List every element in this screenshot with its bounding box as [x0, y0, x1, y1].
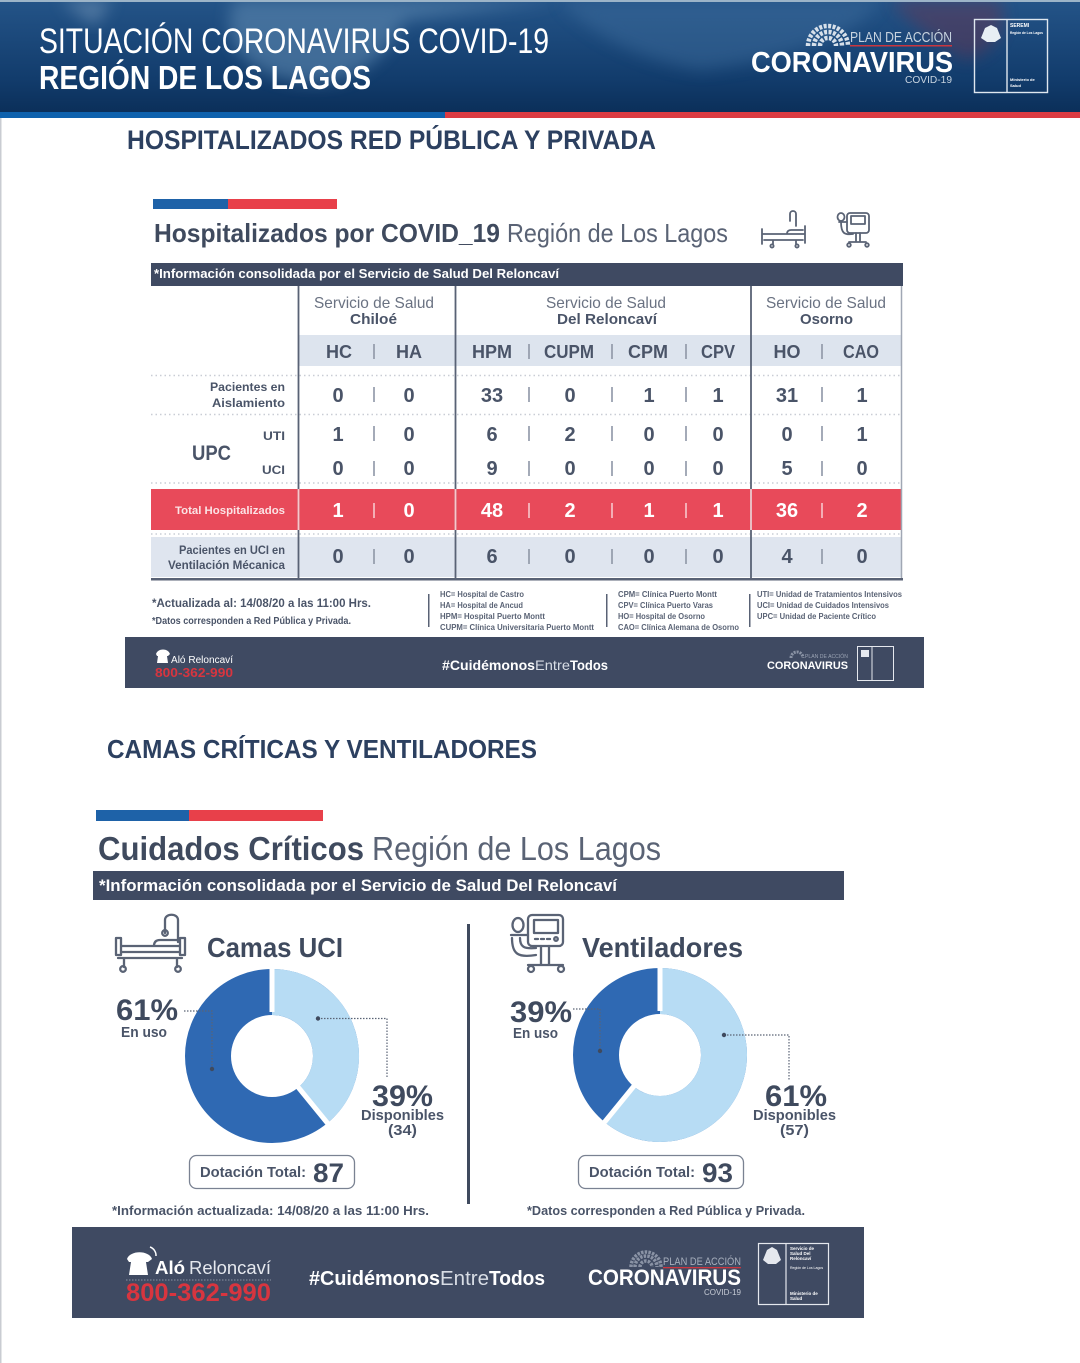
row: UCI: 5 — [781, 458, 793, 480]
row: UTI: 0 — [712, 424, 724, 446]
row labels: Total Hospitalizados — [175, 505, 285, 517]
panel: cuidados críticos — [72, 810, 864, 1318]
heading: camas críticas y ventiladores: CAMAS CRÍTICAS Y VENTILADORES — [107, 734, 537, 764]
header stripe — [0, 112, 1080, 118]
column headers: HA — [396, 342, 422, 362]
helpline: Aló — [155, 1258, 185, 1278]
chart: camas uci donut — [116, 966, 444, 1139]
update note — [152, 596, 371, 627]
callout: en uso: 39% — [510, 996, 572, 1029]
row labels: Pacientes en UCI en — [179, 543, 285, 557]
table banner: *Información consolidada por el Servicio de Salud Del Reloncaví — [154, 266, 559, 281]
hashtag: Todos — [570, 657, 608, 673]
row: total hospitalizados: 48 — [481, 500, 503, 522]
header banner — [0, 0, 1080, 118]
logo: coronavirus: CORONAVIRUS — [767, 660, 848, 672]
glossary: UTI= Unidad de Tratamientos Intensivos — [757, 590, 903, 599]
header title — [39, 22, 549, 96]
header logo: plan de acción coronavirus: CORONAVIRUS — [751, 47, 953, 79]
row: UTI: 1 — [332, 424, 344, 446]
glossary: CPV= Clínica Puerto Varas — [618, 601, 714, 610]
callout: disponibles: Disponibles — [753, 1107, 836, 1124]
row: UTI: 0 — [643, 424, 655, 446]
heading: camas uci: Camas UCI — [207, 932, 343, 963]
row: total hospitalizados: 2 — [564, 500, 576, 522]
table: hospitalizados — [151, 286, 903, 580]
info banner — [93, 871, 844, 900]
row: UTI: 0 — [403, 424, 415, 446]
total: camas uci: Dotación Total: — [200, 1165, 306, 1181]
header logo: plan de acción coronavirus: COVID-19 — [905, 74, 952, 86]
callout: en uso: En uso — [513, 1025, 558, 1042]
row labels: Ventilación Mécanica — [168, 558, 285, 572]
icon: icu bed — [116, 915, 185, 972]
row: total hospitalizados — [332, 500, 868, 522]
row labels: UTI — [263, 429, 285, 443]
callout: disponibles: 61% — [765, 1080, 827, 1113]
column headers: CUPM — [544, 342, 594, 362]
row: UCI: 0 — [403, 458, 415, 480]
row: pacientes en aislamiento: 0 — [403, 385, 415, 407]
row: pacientes en aislamiento: 0 — [564, 385, 576, 407]
header logo: plan de acción coronavirus — [751, 26, 953, 86]
panel title: Cuidados Críticos — [98, 830, 364, 867]
row: pacientes en aislamiento: 1 — [712, 385, 724, 407]
icon: telephone — [156, 650, 170, 663]
update note: *Datos corresponden a Red Pública y Privada. — [152, 615, 351, 627]
callout: disponibles: 39% — [372, 1080, 433, 1113]
glossary: CUPM= Clínica Universitaria Puerto Montt — [440, 623, 594, 632]
glossary: HA= Hospital de Ancud — [440, 601, 523, 610]
panel title: Hospitalizados por COVID_19 — [154, 218, 500, 248]
row: ventilación mecánica: 0 — [564, 546, 576, 568]
panel title — [154, 218, 728, 248]
column headers: HC — [326, 342, 352, 362]
icon: ventilator large — [511, 915, 564, 972]
header logo: seremi: Salud — [1010, 83, 1021, 88]
row: pacientes en aislamiento: 1 — [643, 385, 655, 407]
row: pacientes en aislamiento — [332, 385, 868, 407]
row: ventilación mecánica: 0 — [403, 546, 415, 568]
hashtag — [442, 657, 608, 673]
column headers: HO — [774, 342, 800, 362]
footer band: hospitalizados — [125, 637, 924, 688]
logo: coronavirus: PLAN DE ACCIÓN — [805, 653, 848, 660]
hashtag: #Cuidémonos — [442, 657, 535, 673]
chart: ventiladores donut — [510, 965, 836, 1139]
column headers: CAO — [843, 342, 879, 362]
callout: disponibles: (57) — [780, 1122, 809, 1139]
service names: Servicio de Salud — [314, 295, 434, 312]
header title: SITUACIÓN CORONAVIRUS COVID-19 — [39, 22, 549, 61]
callout: en uso — [116, 994, 214, 1071]
row: ventilación mecánica: 0 — [643, 546, 655, 568]
update note: *Información actualizada: 14/08/20 a las 11:00 Hrs. — [112, 1203, 429, 1218]
logo: coronavirus: CORONAVIRUS — [588, 1265, 741, 1290]
row: pacientes en aislamiento: 0 — [332, 385, 344, 407]
row: UCI: 0 — [332, 458, 344, 480]
column separators — [374, 344, 822, 564]
row: UTI: 0 — [781, 424, 793, 446]
service names: Servicio de Salud — [766, 295, 886, 312]
logo: coronavirus: PLAN DE ACCIÓN — [663, 1255, 741, 1268]
service names — [314, 295, 886, 328]
hashtag: Entre — [440, 1268, 489, 1290]
glossary: HPM= Hospital Puerto Montt — [440, 612, 545, 621]
update note: *Actualizada al: 14/08/20 a las 11:00 Hrs. — [152, 596, 371, 610]
callout: disponibles: (34) — [388, 1122, 417, 1139]
header logo: seremi: SEREMI — [1010, 23, 1030, 29]
row: pacientes en aislamiento: 31 — [776, 385, 798, 407]
total: camas uci — [190, 1156, 354, 1188]
total: ventiladores: 93 — [702, 1158, 733, 1188]
logo: servicio de salud: Servicio de — [790, 1246, 815, 1251]
glossary: HO= Hospital de Osorno — [618, 612, 705, 621]
total: ventiladores: Dotación Total: — [589, 1165, 695, 1181]
table banner — [151, 263, 903, 286]
glossary: HC= Hospital de Castro — [440, 590, 524, 599]
row: total hospitalizados: 1 — [712, 500, 724, 522]
callout: disponibles — [722, 1033, 836, 1139]
glossary: UCI= Unidad de Cuidados Intensivos — [757, 601, 890, 610]
row: total hospitalizados: 0 — [403, 500, 415, 522]
header logo: seremi — [974, 19, 1048, 92]
logo: servicio de salud: Salud Del — [790, 1251, 811, 1256]
row: UCI: 0 — [564, 458, 576, 480]
logo: servicio de salud: Región de Los Lagos — [790, 1266, 823, 1270]
glossary: CPM= Clínica Puerto Montt — [618, 590, 717, 599]
logo: coronavirus: COVID-19 — [704, 1288, 742, 1297]
row: ventilación mecánica — [332, 546, 868, 568]
panel title: Región de Los Lagos — [507, 218, 728, 248]
accent stripe — [96, 810, 323, 821]
heading: ventiladores: Ventiladores — [582, 932, 743, 963]
row: UCI: 0 — [712, 458, 724, 480]
divider — [467, 924, 470, 1204]
row: UCI — [332, 458, 868, 480]
callout: disponibles: Disponibles — [361, 1107, 444, 1124]
service names: Servicio de Salud — [546, 295, 666, 312]
panel title: Región de Los Lagos — [372, 830, 661, 867]
hashtag — [309, 1268, 545, 1290]
row: UTI: 1 — [856, 424, 868, 446]
row labels: UPC — [192, 442, 231, 465]
column headers: CPM — [628, 342, 668, 362]
header logo: plan de acción coronavirus: PLAN DE ACCIÓN — [850, 29, 952, 46]
data note: *Datos corresponden a Red Pública y Privada. — [527, 1203, 805, 1218]
callout: en uso: 61% — [116, 994, 178, 1027]
header logo: seremi: Región de Los Lagos — [1010, 30, 1044, 35]
callout: en uso: En uso — [121, 1024, 167, 1041]
row: ventilación mecánica: 0 — [856, 546, 868, 568]
row labels: Pacientes en — [210, 380, 285, 394]
glossary: CAO= Clínica Alemana de Osorno — [618, 623, 739, 632]
row: total hospitalizados: 1 — [332, 500, 344, 522]
logo: servicio de salud: Reloncaví — [790, 1256, 812, 1261]
helpline: Reloncaví — [189, 1258, 271, 1278]
row: total hospitalizados: 36 — [776, 500, 798, 522]
service names: Osorno — [800, 311, 853, 328]
logo: coronavirus — [767, 646, 894, 680]
helpline — [155, 655, 233, 680]
service names: Chiloé — [350, 311, 397, 328]
row: total hospitalizados: 1 — [643, 500, 655, 522]
column headers: CPV — [701, 342, 735, 362]
total: ventiladores — [578, 1156, 744, 1188]
total: camas uci: 87 — [313, 1158, 344, 1188]
icon: telephone — [127, 1247, 156, 1275]
footer band: cuidados críticos — [72, 1227, 864, 1318]
glossary: UPC= Unidad de Paciente Crítico — [757, 612, 876, 621]
logo: servicio de salud: Ministerio de — [790, 1291, 818, 1296]
hashtag: Todos — [489, 1268, 545, 1290]
row: UCI: 9 — [486, 458, 498, 480]
row: ventilación mecánica: 4 — [781, 546, 793, 568]
helpline — [126, 1258, 271, 1307]
row: pacientes en aislamiento: 33 — [481, 385, 503, 407]
info banner: *Información consolidada por el Servicio de Salud Del Reloncaví — [99, 876, 618, 895]
callout: disponibles — [316, 1016, 444, 1139]
logo: servicio de salud: Salud — [790, 1296, 803, 1301]
hashtag: Entre — [535, 657, 570, 673]
row: ventilación mecánica: 0 — [332, 546, 344, 568]
row: total hospitalizados: 2 — [856, 500, 868, 522]
column headers — [326, 342, 879, 362]
helpline: Aló Reloncaví — [171, 655, 233, 666]
row: UCI: 0 — [856, 458, 868, 480]
panel: hospitalizados — [125, 199, 924, 688]
callout: en uso — [510, 996, 602, 1053]
row labels — [168, 380, 285, 572]
accent stripe — [153, 199, 337, 209]
helpline: 800-362-990 — [126, 1279, 271, 1307]
row: UTI: 6 — [486, 424, 498, 446]
service names: Del Reloncaví — [557, 311, 658, 328]
column headers: HPM — [472, 342, 512, 362]
glossary — [428, 590, 903, 632]
helpline: 800-362-990 — [155, 665, 233, 680]
row: UTI: 2 — [564, 424, 576, 446]
panel title — [98, 830, 661, 867]
icon: ventilator — [838, 213, 869, 247]
icon: hospital bed — [762, 211, 805, 248]
row: ventilación mecánica: 0 — [712, 546, 724, 568]
row: pacientes en aislamiento: 1 — [856, 385, 868, 407]
row: ventilación mecánica: 6 — [486, 546, 498, 568]
heading: hospitalizados red pública y privada: HOSPITALIZADOS RED PÚBLICA Y PRIVADA — [127, 124, 656, 155]
header title: REGIÓN DE LOS LAGOS — [39, 59, 371, 96]
hashtag: #Cuidémonos — [309, 1268, 440, 1290]
row labels: Aislamiento — [212, 396, 285, 410]
header logo: seremi: Ministerio de — [1010, 77, 1035, 82]
row: UCI: 0 — [643, 458, 655, 480]
logo: servicio de salud — [758, 1244, 828, 1304]
row: UTI — [332, 424, 868, 446]
logo: coronavirus — [588, 1252, 742, 1297]
row labels: UCI — [262, 463, 285, 477]
